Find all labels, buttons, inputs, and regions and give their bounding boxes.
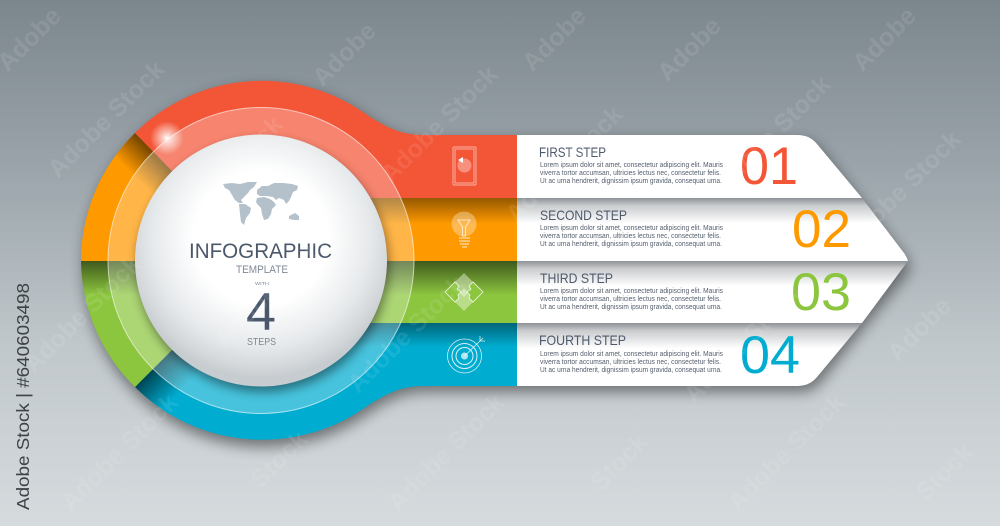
central disc shadow xyxy=(137,140,389,392)
step 4 text xyxy=(539,332,723,374)
panel: white step cards xyxy=(517,135,908,386)
step 4 text: Ut ac urna hendrerit, dignissim ipsum gravida, consequat urna. xyxy=(540,365,722,374)
step 1 number: 01 xyxy=(740,137,798,196)
stock watermarks: Adobe Stock xyxy=(375,60,503,188)
step 3 text: THIRD STEP xyxy=(540,270,613,286)
stock watermarks: Adobe Stock xyxy=(18,250,146,378)
stock watermarks: Adobe Stock xyxy=(838,125,966,253)
stock watermarks: Stock xyxy=(245,425,313,493)
icon: light bulb xyxy=(452,212,476,247)
stock watermarks: Adobe xyxy=(847,2,922,77)
stock watermarks: Adobe xyxy=(652,12,727,87)
stock watermarks: Adobe Stock xyxy=(722,388,850,516)
step 4 number: 04 xyxy=(740,326,800,385)
stock id label: Adobe Stock | #640603498 xyxy=(13,283,33,510)
card 4 xyxy=(517,323,862,386)
stock watermarks: Adobe xyxy=(517,2,592,77)
step 3 number: 03 xyxy=(791,263,851,322)
step 1 text: FIRST STEP xyxy=(539,144,606,160)
glass sparkle xyxy=(150,121,184,155)
card 1 xyxy=(517,135,862,198)
segment: orange xyxy=(81,133,517,261)
label: with: WITH xyxy=(255,281,270,287)
stock watermarks: Adobe Stock xyxy=(678,280,806,408)
stock watermarks: Adobe xyxy=(307,17,382,92)
step 3 text: Lorem ipsum dolor sit amet, consectetur adipiscing elit. Mauris xyxy=(540,286,723,295)
stock watermarks: Adobe Stock xyxy=(382,388,510,516)
stock watermarks: Adobe Stock xyxy=(708,70,836,198)
step 1 text: Lorem ipsum dolor sit amet, consectetur adipiscing elit. Mauris xyxy=(540,160,723,169)
step 4 text: FOURTH STEP xyxy=(539,332,626,348)
diagram drop shadow xyxy=(84,87,909,447)
icon: world map xyxy=(223,182,299,225)
icon: puzzle xyxy=(445,273,483,311)
subheading: template: TEMPLATE xyxy=(236,264,288,276)
central disc xyxy=(135,134,387,386)
card 3 xyxy=(517,261,908,323)
step 4 text: viverra tortor accumsan, ultricies lectus nec, consectetur felis. xyxy=(540,357,721,366)
step 2 text xyxy=(540,207,723,248)
heading: infographic: INFOGRAPHIC xyxy=(189,240,332,263)
step 1 text xyxy=(539,144,723,185)
stock watermarks: Adobe Stock xyxy=(208,225,336,353)
stock watermarks: Stock xyxy=(910,438,978,506)
step 1 text: Ut ac urna hendrerit, dignissim ipsum gravida, consequat urna. xyxy=(540,176,722,185)
glass ring xyxy=(108,108,414,414)
card 2 xyxy=(517,198,908,261)
label: steps: STEPS xyxy=(247,336,276,348)
segment: red xyxy=(135,81,517,198)
number of steps: 4 xyxy=(246,283,276,342)
step 3 text: Ut ac urna hendrerit, dignissim ipsum gravida, consequat urna. xyxy=(540,302,722,311)
segment: blue xyxy=(135,323,517,440)
stock watermarks: Adobe Stock xyxy=(42,55,170,183)
stock watermarks: Adobe Stock xyxy=(500,100,628,228)
stock watermarks: Adobe Stock xyxy=(342,270,470,398)
step 3 text xyxy=(540,270,723,311)
stock watermarks: Adobe xyxy=(882,292,957,367)
step 2 text: Ut ac urna hendrerit, dignissim ipsum gravida, consequat urna. xyxy=(540,239,722,248)
stock watermarks: Stock xyxy=(585,428,653,496)
segment: green xyxy=(70,261,517,387)
icon: tablet with pie chart xyxy=(453,147,476,185)
icon: target with arrow xyxy=(448,336,485,373)
stock watermarks: Adobe Stock xyxy=(160,110,288,238)
step 1 text: viverra tortor accumsan, ultricies lectus nec, consectetur felis. xyxy=(540,168,721,177)
step 2 text: Lorem ipsum dolor sit amet, consectetur adipiscing elit. Mauris xyxy=(540,223,723,232)
step 2 text: viverra tortor accumsan, ultricies lectus nec, consectetur felis. xyxy=(540,231,721,240)
step 4 text: Lorem ipsum dolor sit amet, consectetur adipiscing elit. Mauris xyxy=(540,349,723,358)
step 3 text: viverra tortor accumsan, ultricies lectus nec, consectetur felis. xyxy=(540,294,721,303)
step 2 text: SECOND STEP xyxy=(540,207,627,223)
step 2 number: 02 xyxy=(792,200,851,259)
stock watermarks: Adobe Stock xyxy=(55,388,183,516)
